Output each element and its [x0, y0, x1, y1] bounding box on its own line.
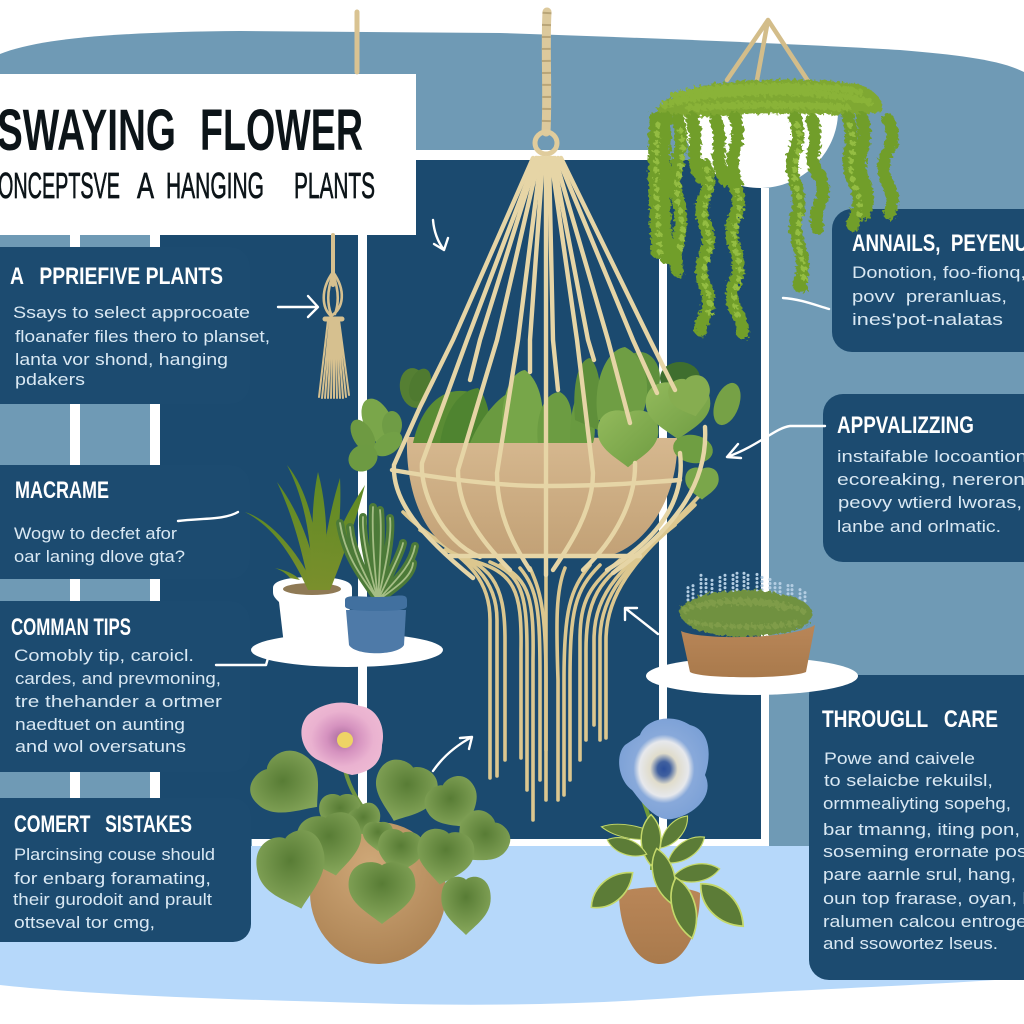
cage strands — [392, 158, 705, 578]
heading: COMERT SISTAKES — [14, 811, 192, 838]
arrow: pink plant to basket — [433, 737, 472, 771]
body text: for enbarg foramating, — [14, 869, 211, 888]
body text — [13, 303, 270, 389]
left shelf with potted plants — [245, 465, 443, 667]
body text: bar tmanng, iting pon, — [823, 820, 1020, 839]
main hanging planter — [344, 12, 746, 820]
line: common tips to shelf — [216, 658, 268, 665]
body text: oar laning dlove gta? — [14, 547, 185, 566]
floor — [0, 846, 1024, 1005]
foliage in basket — [397, 347, 746, 500]
white pot — [273, 577, 352, 652]
blue flower — [619, 718, 709, 819]
card: appropriate plants — [0, 247, 270, 404]
shelf — [646, 657, 858, 695]
subtitle: ONCEPTSVE — [0, 165, 120, 206]
body text: povv preranluas, — [852, 287, 1007, 306]
pointed leaves — [584, 811, 752, 941]
card: appvalizzing — [823, 394, 1024, 562]
body text — [14, 646, 222, 756]
heading: APPVALIZZING — [837, 412, 974, 439]
body text: to selaicbe rekuilsl, — [824, 771, 993, 790]
card: common mistakes — [0, 798, 251, 942]
body text — [823, 749, 1024, 953]
body text — [837, 447, 1024, 536]
heart leaves — [241, 742, 517, 935]
dark central panel — [160, 160, 761, 839]
body text: their gurodoit and prault — [13, 890, 212, 909]
body text: Wogw to decfet afor — [14, 524, 177, 543]
hanging moss planter — [652, 20, 892, 337]
window frame — [70, 150, 769, 846]
fringe strands — [403, 495, 700, 820]
body text: and wol oversatuns — [15, 737, 186, 756]
hanger ropes — [727, 20, 810, 84]
arrow: shelf to fringe — [625, 608, 658, 634]
heading: MACRAME — [15, 477, 109, 504]
body text: ralumen calcou entroge — [823, 912, 1024, 931]
striped plant — [340, 507, 415, 600]
body text: Ssays to select approcoate — [13, 303, 250, 322]
stem — [345, 770, 372, 820]
side leaf cluster — [344, 393, 407, 477]
blue pot — [345, 595, 407, 653]
body text: lanbe and orlmatic. — [837, 517, 1001, 536]
card: thorough care — [809, 675, 1024, 980]
body text: Donotion, foo-fionq, — [852, 263, 1024, 282]
body text: pdakers — [15, 370, 85, 389]
body text: floanafer files thero to planset, — [15, 327, 270, 346]
aloe plant — [245, 465, 365, 590]
subtitle: HANGING — [166, 165, 264, 206]
line: annuals card — [783, 298, 829, 309]
body text: ottseval tor cmg, — [14, 913, 155, 932]
body text: ormmealiyting sopehg, — [823, 794, 1011, 813]
pink flower — [301, 703, 383, 775]
subtitle: PLANTS — [294, 165, 375, 206]
body text: oun top frarase, oyan, l — [823, 889, 1024, 908]
subtitle — [0, 165, 375, 206]
hanging rope upper left — [354, 12, 360, 72]
rope and ring — [535, 12, 557, 154]
moss — [679, 590, 812, 637]
body text — [13, 845, 215, 932]
trailing vines — [654, 118, 892, 337]
basket bowl — [407, 437, 677, 557]
title: SWAYING — [0, 98, 176, 163]
right shelf with moss pot — [646, 570, 858, 695]
heading: A PPRIEFIVE PLANTS — [10, 263, 223, 290]
card: common tips — [0, 601, 250, 772]
body text: Plarcinsing couse should — [14, 845, 215, 864]
lavender sprigs — [688, 570, 805, 605]
body text: ines'pot-nalatas — [852, 310, 1003, 329]
round pot — [310, 822, 446, 964]
body text: and ssowortez lseus. — [823, 934, 998, 953]
body text: naedtuet on aunting — [15, 715, 185, 734]
terracotta pot — [619, 887, 700, 964]
body text: ecoreaking, nereron — [837, 470, 1024, 489]
macrame tassel — [319, 235, 349, 398]
pink flower plant — [241, 703, 517, 964]
moss ring — [652, 79, 882, 126]
terracotta pot — [681, 625, 815, 677]
body text: soseming erornate pos — [823, 842, 1024, 861]
arrow: appvalizzing to basket — [727, 426, 825, 458]
body text: cardes, and prevmoning, — [15, 669, 221, 688]
body text: instaifable locoantion — [837, 447, 1024, 466]
body text: Comobly tip, caroicl. — [14, 646, 194, 665]
subtitle: A — [137, 165, 154, 206]
arrow: to basket top — [433, 220, 448, 250]
card: annuals and perennials — [832, 209, 1024, 352]
white pot — [680, 112, 838, 188]
body text: tre thehander a ortmer — [15, 692, 222, 711]
blue flower plant — [584, 718, 752, 964]
body text — [852, 263, 1024, 329]
title panel — [0, 74, 416, 235]
title: FLOWER — [200, 98, 363, 163]
heading: COMMAN TIPS — [11, 614, 131, 641]
body text: lanta vor shond, hanging — [15, 350, 228, 369]
arrow: from card one to tassel — [278, 296, 318, 317]
soil — [283, 583, 341, 595]
line: macrame card — [178, 512, 238, 521]
body text: peovy wtierd lworas, — [838, 493, 1022, 512]
stem — [643, 800, 653, 870]
body text: pare aarnle srul, hang, — [823, 865, 1016, 884]
body text: Powe and caivele — [824, 749, 975, 768]
shelf — [251, 633, 443, 667]
body text — [14, 524, 185, 566]
card: macrame — [0, 465, 250, 579]
